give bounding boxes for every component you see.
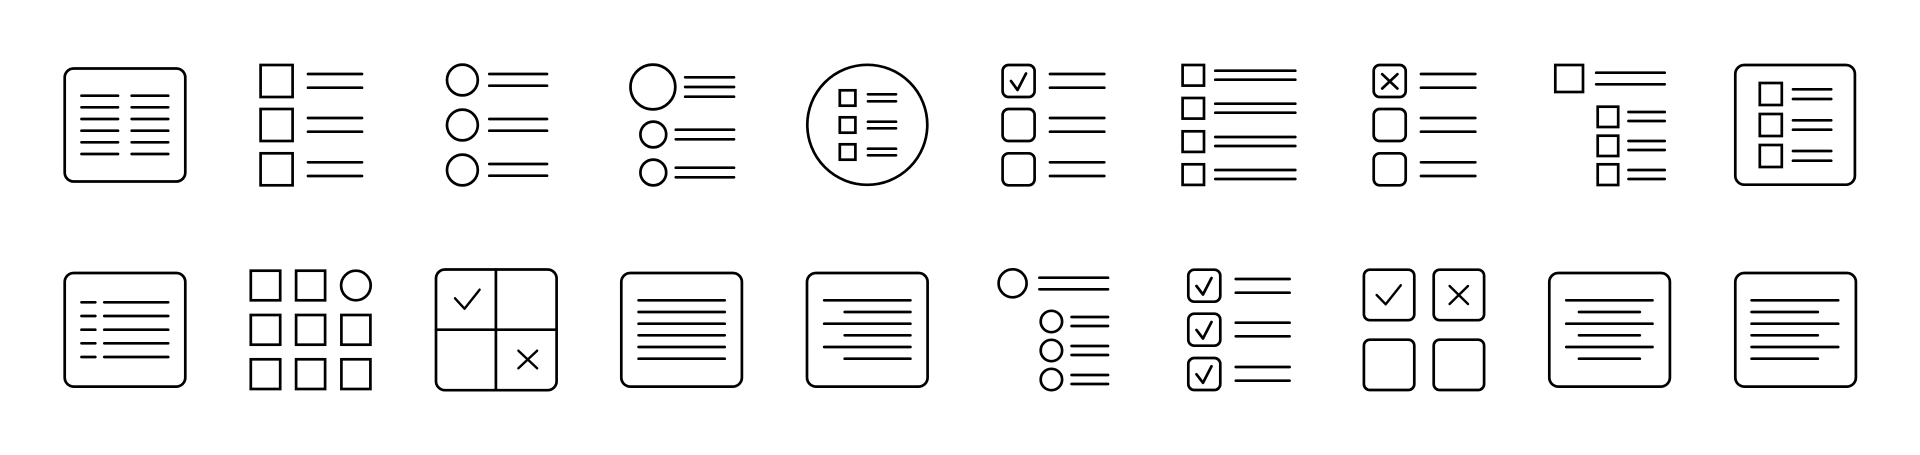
icon: fully ticked checkbox list (1188, 270, 1290, 390)
icon: square bullet list (261, 65, 362, 185)
icon: full-width text panel (621, 273, 742, 387)
icon: rounded checkbox list with one cross (1374, 65, 1475, 185)
icon: rounded checkbox list with one tick (1003, 65, 1104, 185)
icon: left-aligned text panel (1735, 273, 1856, 387)
icon: right-aligned text panel (807, 273, 928, 387)
icon: centred text panel (1549, 273, 1670, 387)
icon: dash list panel (65, 273, 185, 387)
icon: nested square list (1555, 65, 1665, 185)
icon: checklist inside circle (807, 65, 927, 185)
icon: three by three grid with a circle (251, 271, 371, 389)
icon: large circle with two sub-items (630, 65, 734, 185)
icon: circle bullet list (447, 65, 547, 185)
icon: four-cell panel with tick and cross (436, 270, 557, 390)
icon: two-column text panel (65, 68, 185, 182)
icon: two by two tile grid with tick and cross (1364, 270, 1484, 390)
icon: nested circle list (999, 269, 1108, 390)
icon: four-row square list (1183, 65, 1295, 185)
icon: checklist inside rounded panel (1735, 65, 1855, 185)
